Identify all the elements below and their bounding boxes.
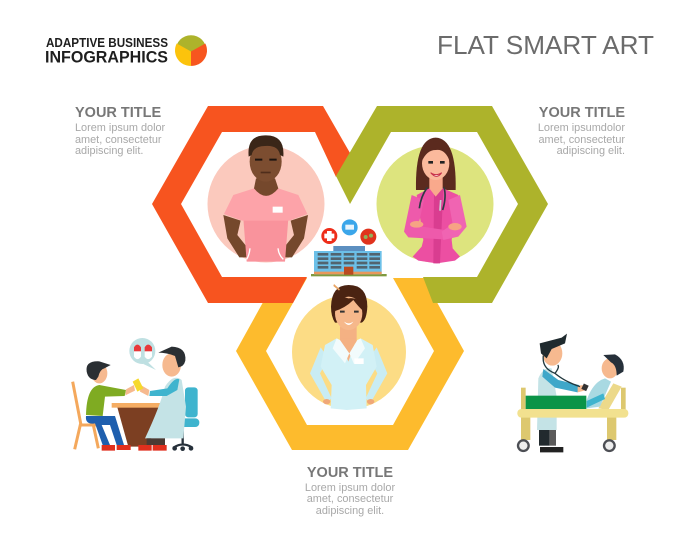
text block: bottom: Lorem ipsum dolor: [305, 482, 395, 494]
circle: yellow background: [292, 295, 406, 409]
figure: male nurse: [223, 135, 308, 262]
office chair: [169, 387, 199, 451]
text block: right: [538, 105, 625, 157]
icon: logo pie: [175, 35, 207, 66]
text block: bottom: [305, 465, 395, 517]
patient: [86, 361, 135, 451]
mattress: [526, 396, 586, 409]
icon: pills badge: [360, 229, 376, 245]
text block: bottom: amet, consectetur: [307, 493, 394, 505]
logo heading: INFOGRAPHICS: [45, 48, 168, 66]
scene: doctor and patient at desk: [73, 338, 199, 451]
circle: green background: [376, 146, 494, 262]
desk: [112, 403, 168, 447]
text block: right: adipiscing elit.: [557, 145, 625, 157]
text block: right: YOUR TITLE: [539, 105, 625, 121]
icon: medical cross badge: [321, 228, 337, 244]
main title: FLAT SMART ART: [437, 30, 654, 60]
text block: bottom: YOUR TITLE: [307, 465, 393, 481]
scene: doctor examining patient in bed: [517, 334, 628, 452]
text block: left: amet, consectetur: [75, 134, 162, 146]
icon: ambulance badge: [342, 219, 358, 235]
text block: left: [75, 105, 166, 157]
icon: hospital group: [311, 219, 387, 276]
hexagon: green: [336, 106, 548, 303]
infographic canvas: [46, 35, 654, 516]
speech bubble with pills: [129, 338, 156, 370]
bed legs and wheels: [518, 388, 626, 451]
text block: left: YOUR TITLE: [75, 105, 162, 121]
text block: right: amet, consectetur: [538, 134, 625, 146]
text block: left: Lorem ipsum dolor: [75, 122, 166, 134]
patient in bed: [587, 354, 624, 410]
chair: [73, 382, 101, 449]
hexagon: yellow: [236, 278, 464, 450]
figure: female physician: [310, 284, 387, 410]
card: [133, 378, 143, 392]
doctor: [138, 347, 186, 451]
circle: red background: [208, 146, 324, 262]
doctor standing: [537, 334, 589, 452]
figure: female doctor: [404, 138, 467, 263]
text block: bottom: adipiscing elit.: [316, 505, 384, 517]
bed frame: [517, 409, 628, 418]
text block: left: adipiscing elit.: [75, 145, 143, 157]
hospital building: [311, 246, 387, 276]
logo heading: [45, 36, 168, 66]
logo heading: ADAPTIVE BUSINESS: [46, 36, 168, 50]
text block: right: Lorem ipsumdolor: [538, 122, 625, 134]
hexagon: red: [152, 106, 350, 303]
